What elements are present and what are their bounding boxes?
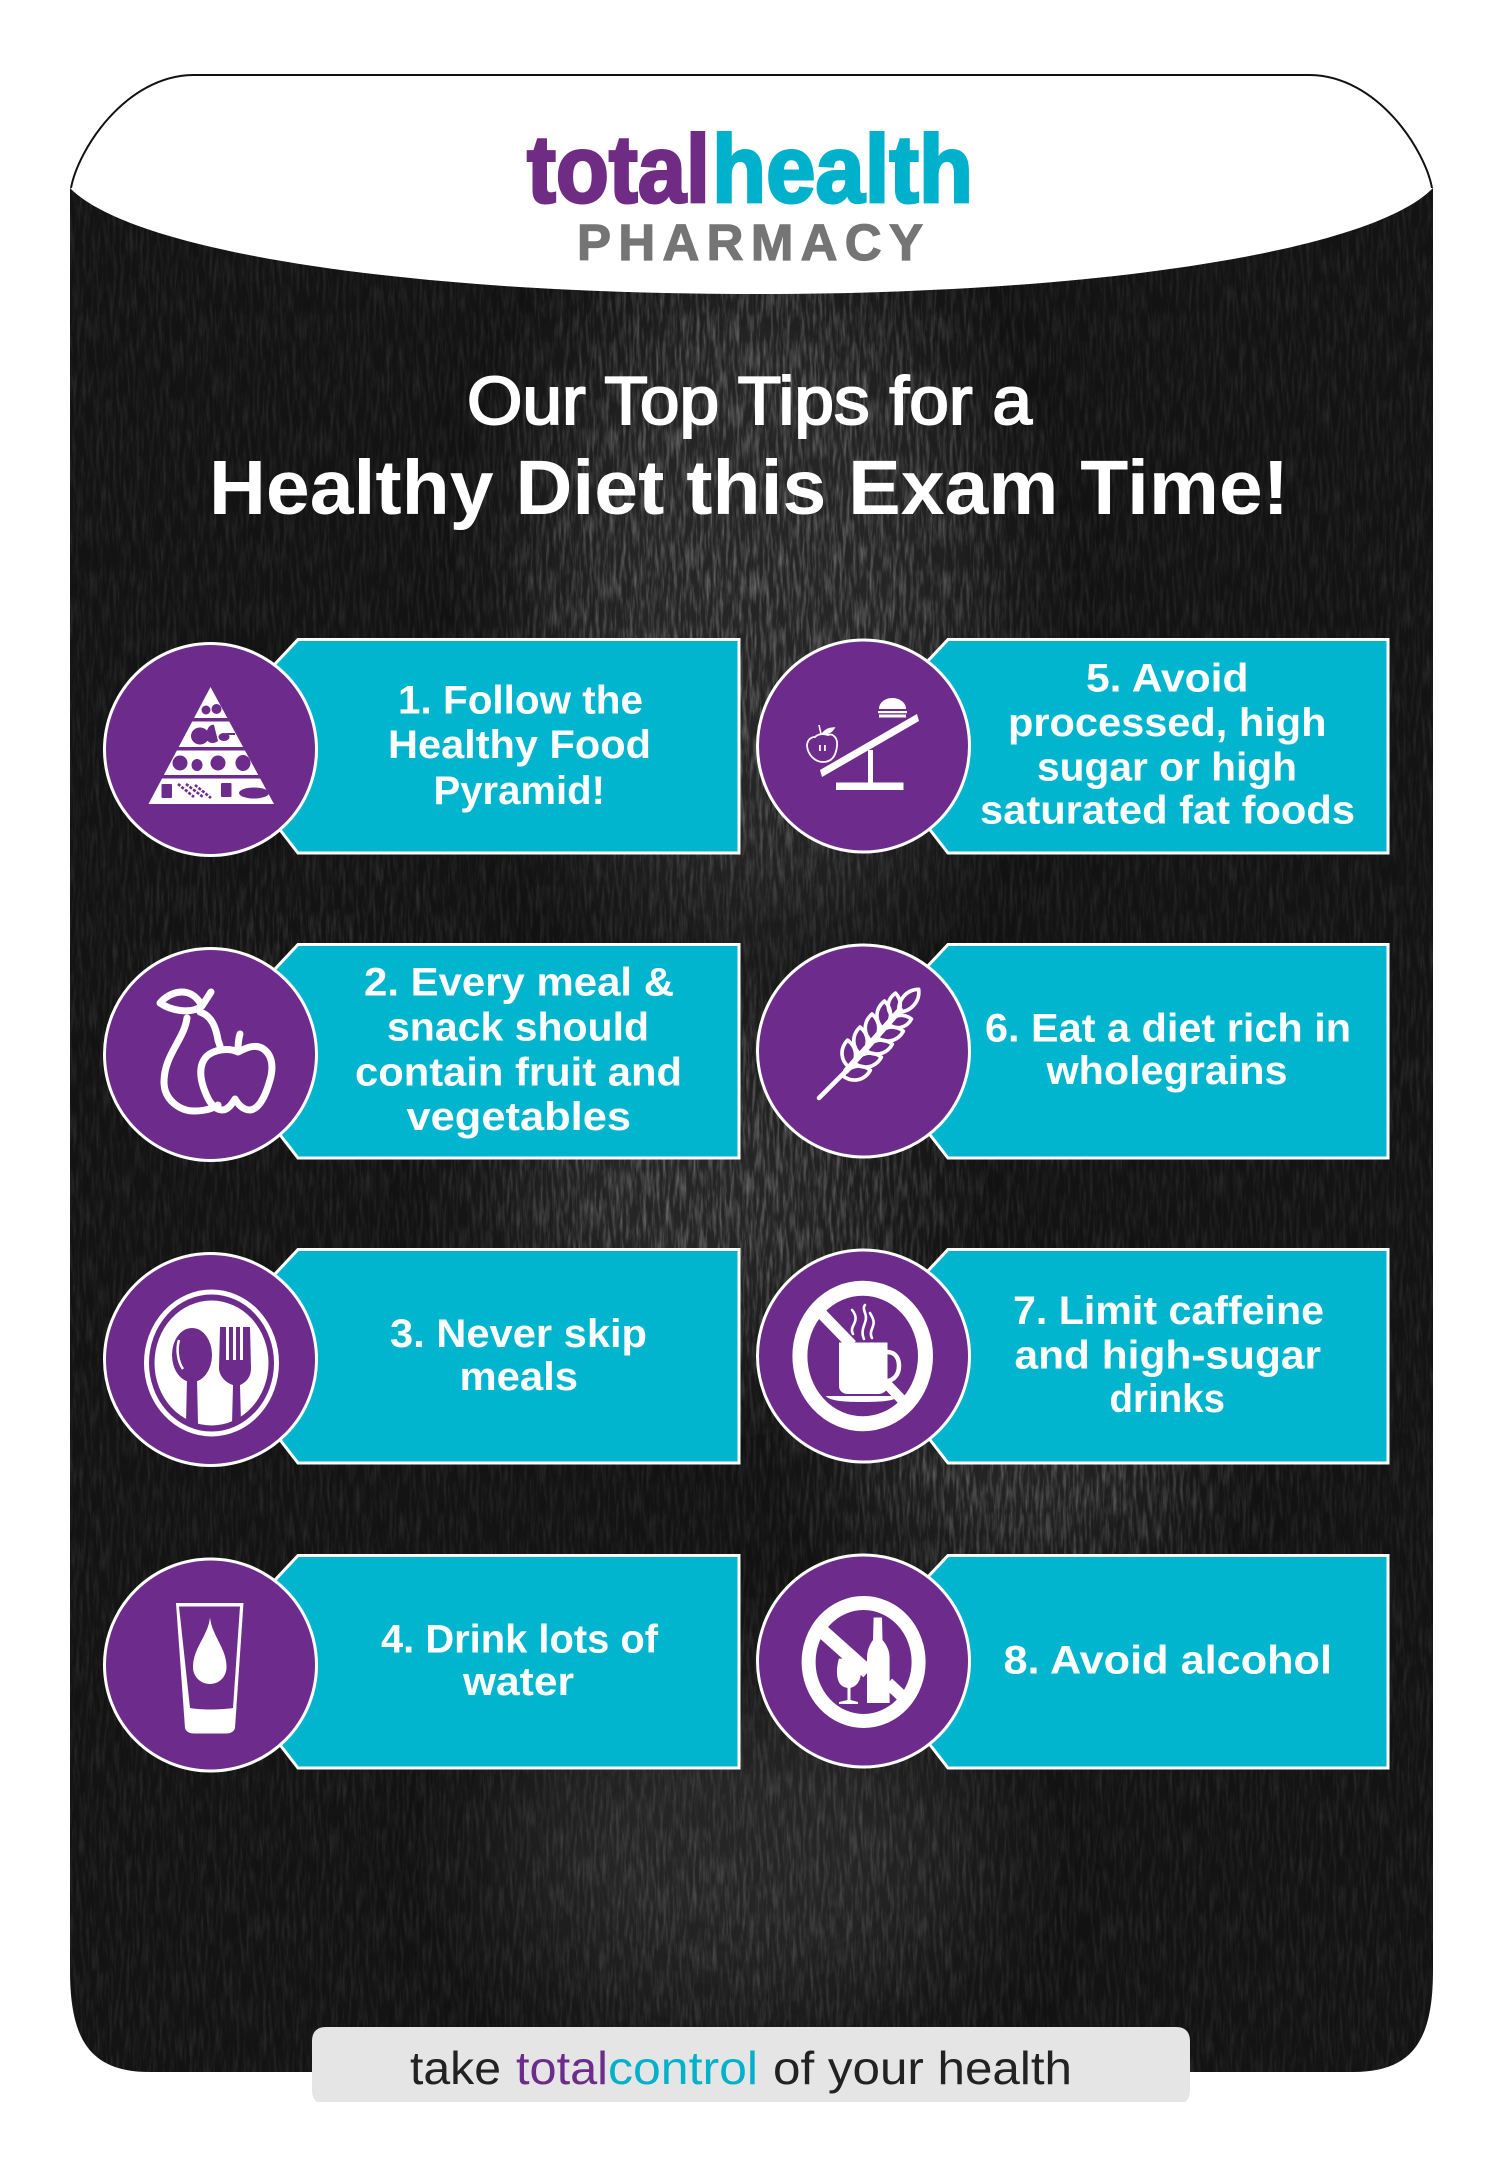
text: tip 1: 1. Follow the bbox=[398, 678, 643, 722]
footer tagline bar bbox=[312, 2027, 1190, 2102]
footer tagline bar: control bbox=[608, 2042, 758, 2094]
tip 1: food pyramid bbox=[104, 640, 739, 856]
text: tip 4 bbox=[381, 1618, 659, 1704]
title: Our Top Tips for a bbox=[467, 363, 1032, 439]
text: tip 5: saturated fat foods bbox=[980, 788, 1355, 832]
tip 5: avoid processed foods bbox=[758, 640, 1388, 853]
text: tip 4: 4. Drink lots of bbox=[381, 1618, 659, 1662]
text: tip 1: Healthy Food bbox=[388, 723, 651, 767]
tip 4: drink water bbox=[104, 1556, 739, 1771]
text: tip 6: wholegrains bbox=[1045, 1049, 1288, 1093]
text: tip 2 bbox=[355, 960, 682, 1139]
title bbox=[209, 363, 1289, 531]
text: tip 3 bbox=[390, 1312, 647, 1399]
text: tip 5: processed, high bbox=[1008, 701, 1326, 745]
text: tip 2: contain fruit and bbox=[355, 1050, 682, 1094]
icon: no coffee sign bbox=[800, 1288, 926, 1424]
footer tagline bar: take bbox=[410, 2042, 501, 2094]
logo: totalhealth pharmacy bbox=[527, 116, 973, 271]
tip 2: fruit and vegetables bbox=[104, 944, 739, 1160]
logo: totalhealth pharmacy: health bbox=[712, 116, 973, 223]
text: tip 1: Pyramid! bbox=[434, 769, 605, 813]
icon: wheat ear bbox=[819, 985, 924, 1098]
tip 3: never skip meals bbox=[104, 1250, 739, 1466]
icon: no alcohol sign bbox=[809, 1603, 919, 1721]
text: tip 1 bbox=[388, 678, 651, 813]
icon: seesaw with apple and burger bbox=[807, 698, 919, 790]
text: tip 7: and high-sugar bbox=[1014, 1334, 1321, 1378]
footer tagline bar: total bbox=[516, 2042, 608, 2094]
icon: food pyramid bbox=[140, 687, 280, 804]
icon: glass with water drop bbox=[176, 1603, 244, 1734]
text: tip 5: sugar or high bbox=[1037, 746, 1297, 790]
text: tip 3: 3. Never skip bbox=[390, 1312, 647, 1356]
text: tip 5 bbox=[980, 656, 1355, 832]
text: tip 5: 5. Avoid bbox=[1086, 656, 1248, 700]
tip 8: avoid alcohol bbox=[758, 1555, 1388, 1768]
header: white logo cap bbox=[70, 75, 1433, 294]
text: tip 3: meals bbox=[460, 1355, 578, 1399]
icon: pear and apple bbox=[160, 992, 272, 1111]
text: tip 6: 6. Eat a diet rich in bbox=[985, 1006, 1351, 1050]
footer tagline bar: of your health bbox=[773, 2042, 1072, 2094]
text: tip 7: drinks bbox=[1110, 1377, 1225, 1421]
text: tip 2: vegetables bbox=[406, 1095, 631, 1139]
tip 6: eat wholegrains bbox=[758, 944, 1388, 1158]
text: tip 8: 8. Avoid alcohol bbox=[1004, 1638, 1332, 1682]
text: tip 2: 2. Every meal & bbox=[364, 960, 674, 1004]
icon: plate with spoon and fork bbox=[146, 1292, 276, 1434]
text: tip 2: snack should bbox=[387, 1006, 649, 1050]
logo: totalhealth pharmacy: total bbox=[527, 116, 710, 223]
text: tip 7 bbox=[1013, 1289, 1324, 1421]
text: tip 6 bbox=[985, 1006, 1351, 1093]
logo: totalhealth pharmacy: PHARMACY bbox=[577, 214, 923, 271]
tip 7: limit caffeine bbox=[758, 1250, 1388, 1463]
text: tip 7: 7. Limit caffeine bbox=[1013, 1289, 1324, 1333]
title: Healthy Diet this Exam Time! bbox=[209, 445, 1289, 531]
text: tip 4: water bbox=[462, 1660, 574, 1704]
